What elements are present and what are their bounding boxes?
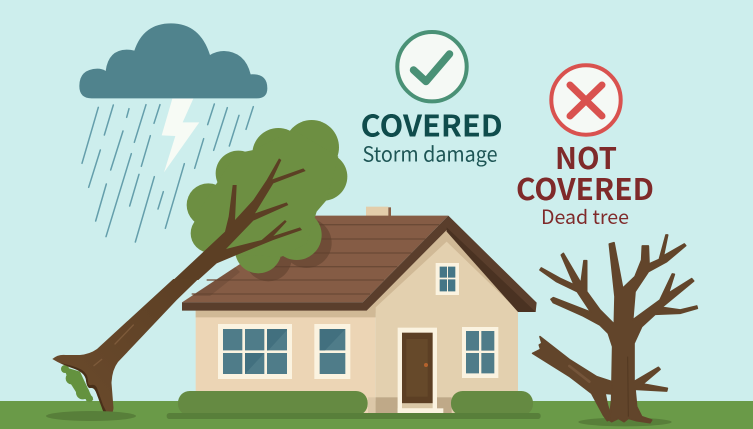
green foliage under root bbox=[61, 365, 93, 402]
covered panel bbox=[361, 32, 503, 167]
limb highlight bbox=[569, 366, 589, 382]
gable wall bbox=[367, 228, 518, 413]
ground bbox=[0, 401, 753, 429]
not covered panel bbox=[516, 65, 654, 230]
heading: not: NOT bbox=[555, 136, 617, 178]
caption: dead tree: Dead tree bbox=[541, 201, 629, 230]
roof trim bbox=[182, 216, 537, 312]
tree shadow on roof bbox=[192, 220, 332, 296]
chimney bbox=[366, 207, 391, 216]
tree canopy bbox=[187, 120, 347, 273]
shingle lines bbox=[192, 225, 439, 294]
small window bbox=[314, 324, 350, 379]
fallen tree ground shadow bbox=[46, 411, 136, 421]
root shading bbox=[60, 363, 108, 415]
left wall bbox=[196, 310, 376, 413]
roof trim shadow bbox=[447, 227, 536, 312]
dead tree bbox=[533, 235, 697, 426]
attic window bbox=[436, 263, 459, 295]
right hedge bbox=[451, 391, 533, 416]
gable shadow bbox=[196, 229, 518, 317]
fallen trunk and roots bbox=[52, 279, 198, 415]
ground strip bbox=[167, 413, 541, 419]
dead tree trunk and branches bbox=[540, 235, 697, 423]
canopy branches bbox=[173, 158, 306, 280]
trunk highlights bbox=[94, 325, 133, 366]
caption: storm damage: Storm damage bbox=[362, 138, 498, 168]
right window bbox=[462, 327, 498, 378]
front door bbox=[398, 328, 443, 413]
foundation bbox=[368, 397, 452, 413]
trunk bark groove bbox=[626, 357, 630, 417]
icon: storm cloud bbox=[79, 23, 267, 98]
left hedge bbox=[178, 391, 368, 416]
heading: covered: COVERED bbox=[516, 167, 654, 209]
broken limb bbox=[533, 337, 615, 421]
icon: red cross bbox=[551, 65, 621, 135]
house bbox=[167, 207, 541, 419]
dead tree ground shadow bbox=[578, 418, 672, 426]
icon: lightning bolt bbox=[162, 99, 199, 172]
rain streaks bbox=[82, 104, 253, 242]
icon: green check mark bbox=[397, 32, 467, 101]
heading: covered: COVERED bbox=[361, 102, 503, 146]
roof bbox=[182, 216, 448, 302]
large window bbox=[218, 324, 292, 379]
fallen tree bbox=[46, 120, 347, 421]
